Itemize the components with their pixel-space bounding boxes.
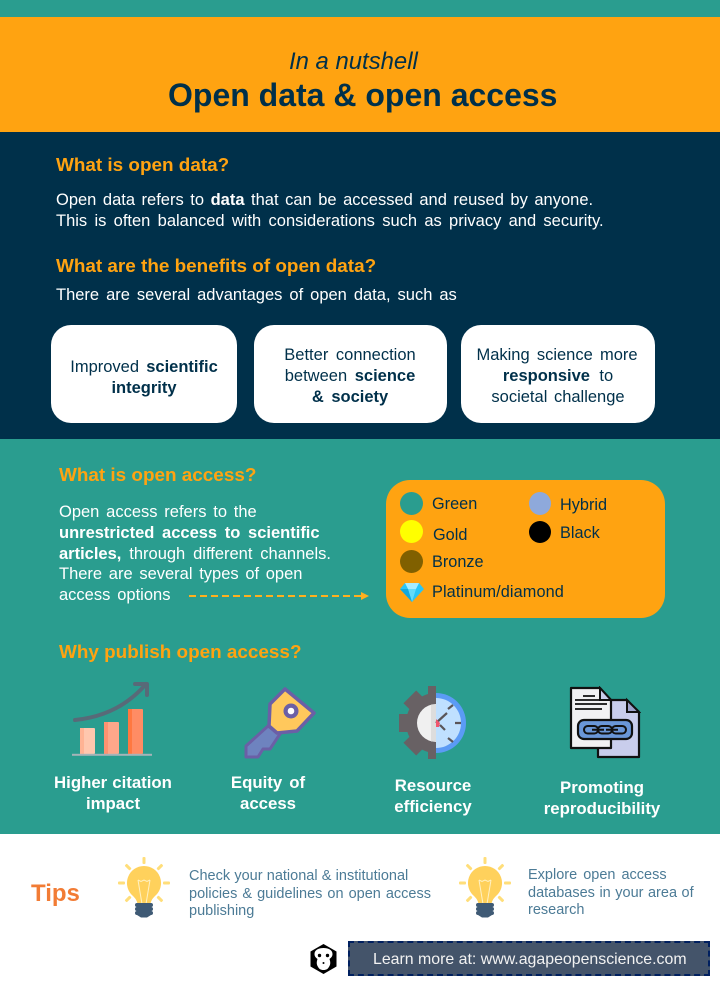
tip: open access databases: research [528,902,584,918]
heading: benefits: What are the benefits of open data? [56,256,376,277]
icon: gear and clock [399,686,466,759]
card: science and society: Better connection [284,346,416,364]
button: learn more [348,941,710,976]
option: gold [400,520,467,544]
option: hybrid [529,492,607,515]
card: science and society: & society [312,388,388,406]
panel: tips [0,834,720,988]
arrow to options [189,592,369,600]
tip: national policies [189,868,431,919]
benefit: higher citation impact: impact [86,794,140,813]
open data definition second line: This is often balanced with considerations such as privacy and security. [56,212,604,230]
option: black [529,521,600,543]
benefit: equity of access: access [240,794,296,813]
benefit: higher citation impact: Higher citation [54,773,172,792]
heading: what is open data: What is open data? [56,155,229,176]
open access definition: unrestricted access to scientific [59,524,320,542]
option: bronze [400,550,484,573]
tip: national policies: publishing [189,903,254,919]
card: scientific integrity [51,325,237,423]
tip: national policies: policies & guidelines on open access [189,886,431,902]
icon: rising bar chart [72,682,152,756]
panel: open access [0,439,720,834]
benefit: promoting reproducibility: reproducibility [544,799,660,818]
card: scientific integrity: Improved scientific [70,358,218,376]
icon: key [244,687,316,758]
subtitle: In a nutshell [289,48,418,75]
tip: open access databases: databases in your area of [528,885,694,901]
top teal band [0,0,720,17]
option: gold: Gold [433,526,467,544]
card: societal challenge: societal challenge [491,388,625,406]
title: Open data & open access [168,77,557,113]
card: science and society: between science [285,367,415,385]
option: platinum diamond: Platinum/diamond [432,583,564,601]
open access definition: access options [59,586,170,604]
option: green [400,492,477,515]
heading: what is open access: What is open access? [59,465,256,486]
tip: national policies: Check your national & institutional [189,868,408,884]
card: societal challenge: responsive to [503,367,613,385]
benefit: resource efficiency [394,686,472,816]
option: hybrid: Hybrid [560,496,607,514]
option: black: Black [560,524,600,542]
panel: open access types [386,480,665,618]
icon: light bulb [118,857,170,918]
heading: why publish: Why publish open access? [59,642,301,663]
benefit: equity of access [231,687,316,813]
open data definition: Open data refers to data that can be accessed and reused by anyone. [56,191,593,209]
header banner [0,17,720,132]
benefit: promoting reproducibility [544,686,660,818]
open access definition: articles, through different channels. [59,545,331,563]
card: societal challenge [461,325,655,423]
tip: open access databases [528,867,694,918]
benefit: higher citation impact [54,682,172,813]
panel: open data [0,132,720,439]
tip: open access databases: Explore open access [528,867,667,883]
benefit: resource efficiency: efficiency [394,797,472,816]
benefit: promoting reproducibility: Promoting [560,778,644,797]
icon: diamond [400,583,424,602]
option: green: Green [432,495,477,513]
open access definition: Open access refers to the [59,503,257,521]
option: bronze: Bronze [432,553,484,571]
benefit: resource efficiency: Resource [395,776,471,795]
card: societal challenge: Making science more [476,346,638,364]
icon: monkey logo [310,944,336,974]
heading: tips: Tips [31,880,80,907]
icon: linked documents [570,686,641,758]
card: scientific integrity: integrity [111,379,177,397]
benefits intro: There are several advantages of open data, such as [56,286,457,304]
card: science and society [254,325,447,423]
benefit: equity of access: Equity of [231,773,305,792]
open access definition: There are several types of open [59,565,302,583]
button: learn more: Learn more at: www.agapeopenscience.com [373,951,687,968]
open access definition [59,503,331,604]
icon: light bulb [459,857,511,918]
